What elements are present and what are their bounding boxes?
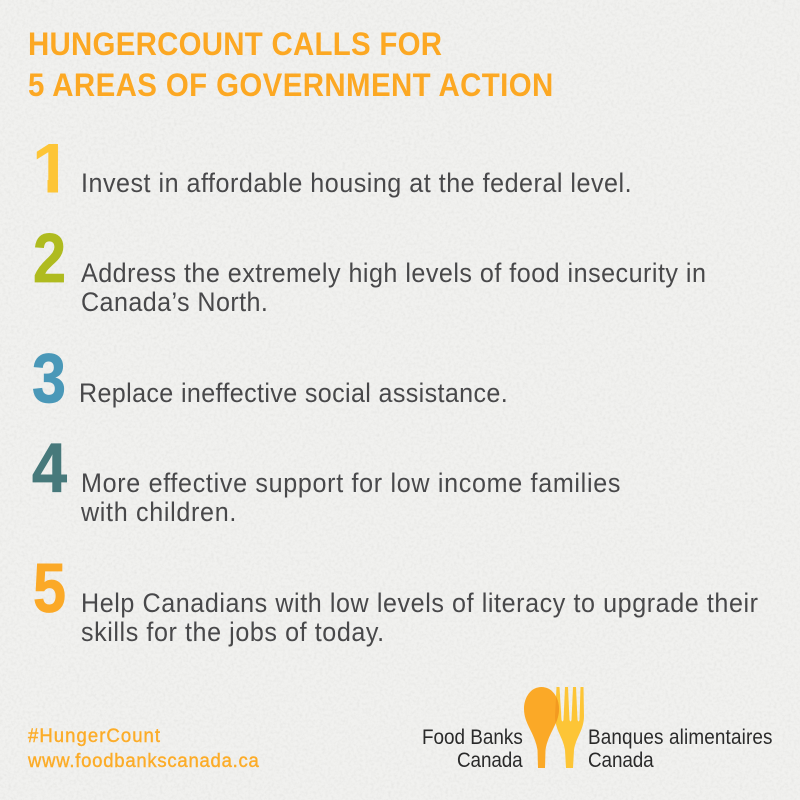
action item 2	[33, 219, 706, 317]
logo text: French	[588, 726, 773, 772]
number 3: 3	[32, 339, 66, 417]
logo: Food Banks Canada	[422, 687, 773, 772]
text: low income families: More effective support for low income families	[81, 467, 620, 498]
title	[28, 26, 553, 103]
icon: fork	[555, 687, 584, 768]
text: literacy: Help Canadians with low levels of literacy to upgrade their	[81, 587, 758, 618]
footer hashtag and website: www.foodbankscanada.ca	[27, 751, 259, 772]
logo text: French: Banques alimentaires	[588, 726, 773, 749]
text: literacy: skills for the jobs of today.	[81, 616, 384, 647]
action item 1	[36, 144, 630, 198]
icon: spoon	[524, 687, 559, 768]
text: social assistance: Replace ineffective social assistance.	[79, 377, 508, 408]
footer hashtag and website	[27, 726, 259, 772]
title: 5 AREAS OF GOVERNMENT ACTION	[28, 67, 553, 103]
logo text: French: Canada	[588, 749, 655, 772]
number 4: 4	[32, 429, 67, 507]
action item 5	[33, 549, 758, 647]
logo text: English: Canada	[457, 749, 524, 772]
text: food insecurity	[81, 257, 706, 317]
title: HUNGERCOUNT CALLS FOR	[28, 26, 442, 62]
footer hashtag and website: #HungerCount	[28, 726, 161, 747]
action item 3	[32, 339, 508, 417]
text: literacy	[81, 587, 758, 647]
icon: spoon and fork overlap	[555, 696, 559, 724]
text: affordable housing: Invest in affordable housing at the federal level.	[81, 167, 632, 198]
text: low income families: with children.	[80, 496, 236, 527]
logo text: English: Food Banks	[422, 726, 523, 749]
number 1	[36, 144, 58, 192]
number 5: 5	[33, 549, 66, 627]
logo text: English	[422, 726, 524, 772]
action item 4	[32, 429, 620, 527]
number 2: 2	[33, 219, 66, 297]
text: food insecurity: Canada’s North.	[81, 286, 268, 317]
text: food insecurity: Address the extremely high levels of food insecurity in	[81, 257, 706, 288]
text: low income families	[80, 467, 620, 527]
number 1: 1	[32, 129, 71, 207]
